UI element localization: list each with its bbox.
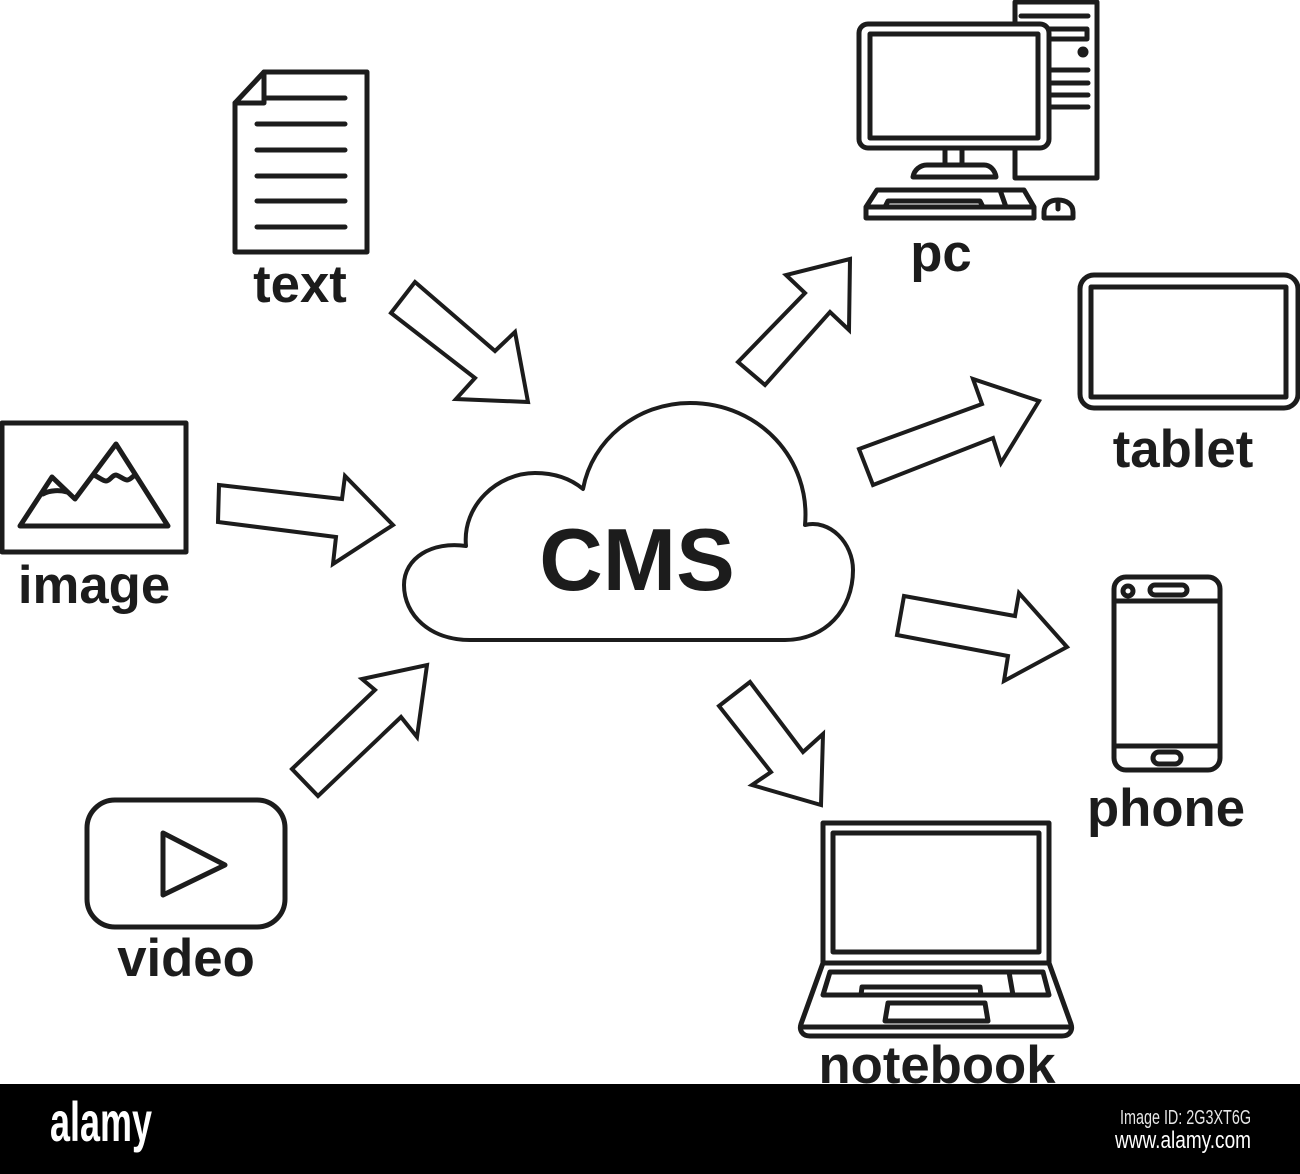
label: tablet: tablet	[1113, 420, 1253, 479]
footer logo: alamy	[50, 1090, 152, 1153]
arrow: video to cloud	[292, 665, 427, 796]
CMS label: CMS	[539, 510, 735, 609]
label: phone: phone	[1087, 779, 1245, 838]
arrow: cloud to notebook	[719, 682, 823, 805]
icon: phone	[1114, 577, 1220, 770]
icon: image	[2, 423, 186, 552]
footer bar	[0, 1084, 1300, 1174]
label: pc: pc	[910, 224, 972, 283]
label: video: video	[117, 929, 255, 988]
label: notebook: notebook	[818, 1036, 1056, 1095]
arrow: cloud to pc	[738, 259, 850, 385]
arrow: cloud to phone	[897, 593, 1067, 681]
icon: text document	[235, 72, 367, 252]
website: www.alamy.com	[1114, 1127, 1251, 1154]
arrow: image to cloud	[218, 476, 393, 564]
image id: Image ID: 2G3XT6G	[1120, 1107, 1251, 1129]
arrow: cloud to tablet	[859, 379, 1039, 485]
icon: tablet	[1080, 275, 1298, 408]
label: text: text	[253, 255, 347, 314]
arrow: text to cloud	[391, 282, 528, 402]
icon: video	[87, 800, 285, 927]
icon: notebook	[800, 823, 1072, 1036]
cloud with CMS	[404, 403, 853, 640]
icon: desktop pc	[859, 2, 1097, 218]
label: image: image	[18, 556, 170, 615]
